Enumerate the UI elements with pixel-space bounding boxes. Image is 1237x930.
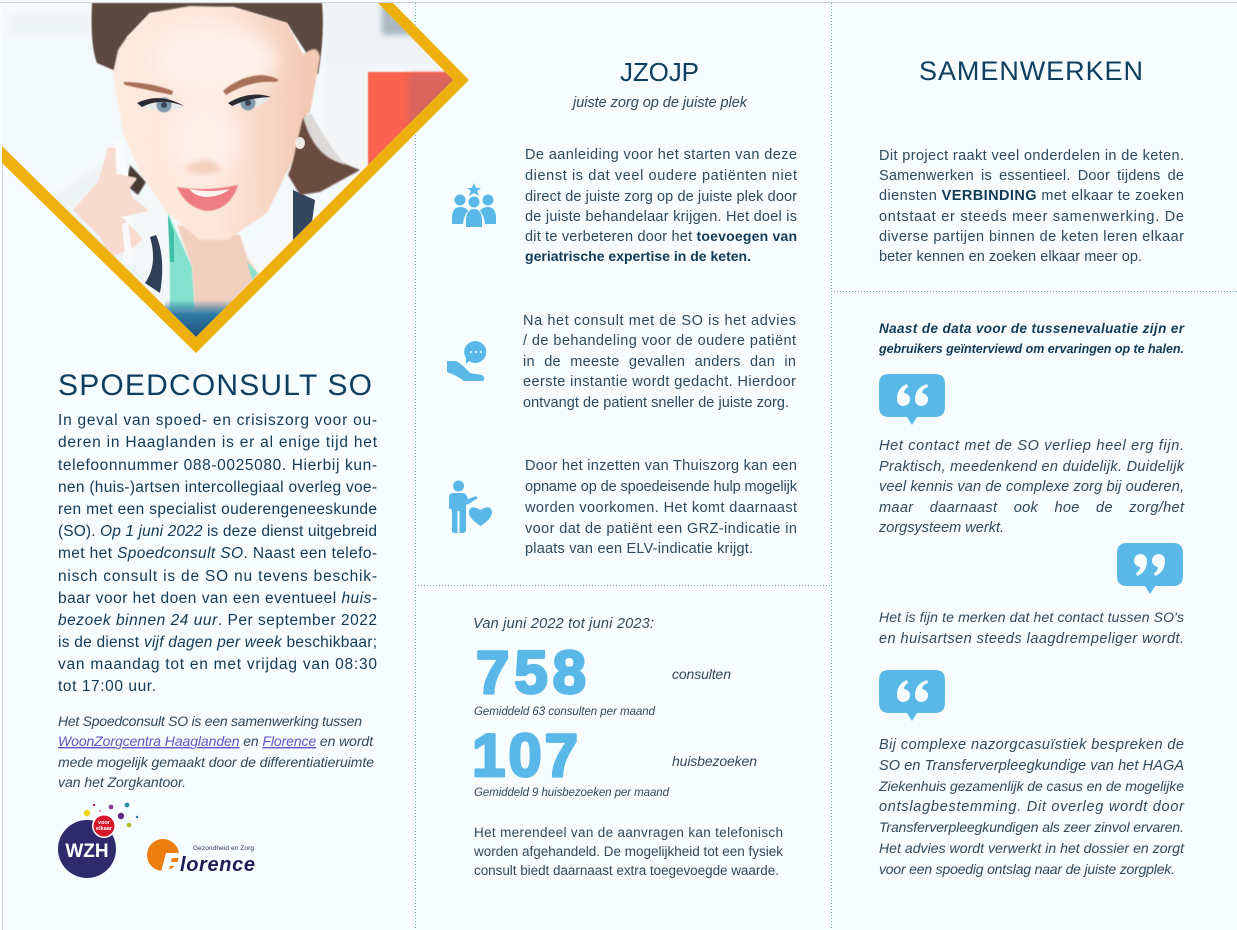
text block: advice after consult — [523, 313, 796, 411]
stats period: Van juni 2022 tot juni 2023: — [473, 616, 654, 632]
text block: interview intro: gebruikers geïnterviewd om ervaringen op te halen. — [878, 342, 1184, 356]
logo: Florence: Gezondheid en Zorg — [193, 845, 254, 852]
text block: reason for the service: De aanleiding voor het starten van deze — [525, 147, 797, 163]
text block: collaboration: ontstaat er steeds meer samenwerking. De — [879, 209, 1184, 225]
text block: introduction: nisch consult is de SO nu tevens beschik- — [58, 568, 377, 585]
text block: introduction: (SO). Op 1 juni 2022 is deze dienst uitgebreid — [58, 523, 377, 540]
icon: group with star — [452, 183, 496, 227]
stats conclusion: Het merendeel van de aanvragen kan telefonisch — [474, 825, 783, 840]
text block: introduction: baar voor het doen van een eventueel huis- — [58, 590, 377, 607]
text block: thuiszorg: worden voorkomen. Het komt daarnaast — [524, 500, 797, 516]
text block: introduction: In geval van spoed- en crisiszorg voor ou- — [58, 412, 377, 429]
text block: introduction: met het Spoedconsult SO. Naast een telefo- — [58, 545, 377, 562]
logo: Florence: lorence — [180, 854, 255, 876]
stat: 758 consultations — [474, 639, 731, 718]
quote 2: en huisartsen steeds laagdrempeliger wordt. — [879, 631, 1184, 647]
text block: partnership note: mede mogelijk gemaakt door de differentiatieruimte — [58, 754, 374, 770]
text block: reason for the service: de juiste behandelaar krijgen. Het doel is — [525, 209, 797, 225]
quote 3: SO en Transferverpleegkundige van het HAGA — [879, 758, 1184, 774]
text block: advice after consult: Na het consult met de SO is het advies — [523, 313, 796, 329]
subheading: juiste zorg op de juiste plek: juiste zorg op de juiste plek — [571, 95, 748, 111]
logo: WZH — [58, 803, 138, 878]
text block: thuiszorg: Door het inzetten van Thuiszorg kan een — [525, 458, 797, 474]
heading: Samenwerken: SAMENWERKEN — [919, 56, 1143, 86]
text block: collaboration — [879, 148, 1184, 265]
text block: thuiszorg — [524, 458, 798, 557]
quote 3: ontslagbestemming. Dit overleg wordt door — [879, 799, 1185, 815]
text block: advice after consult: / de behandeling voor de oudere patiënt — [523, 333, 796, 349]
quote 2: Het is fijn te merken dat het contact tussen SO's — [879, 609, 1184, 625]
text block: introduction: bezoek binnen 24 uur. Per september 2022 — [58, 612, 377, 629]
text block: partnership note: Het Spoedconsult SO is een samenwerking tussen — [58, 713, 362, 729]
quote 2 — [879, 609, 1184, 647]
stats panel — [472, 616, 783, 878]
icon: opening quote bubble 2 — [879, 670, 945, 721]
text block: reason for the service: dienst is dat veel oudere patiënten niet — [525, 168, 797, 184]
quote 1: zorgsysteem werkt. — [878, 520, 1004, 536]
stat: 758 consultations: consulten — [672, 666, 731, 682]
text block: partnership note — [58, 713, 374, 790]
stat: 107 home visits: Gemiddeld 9 huisbezoeken per maand — [474, 787, 670, 799]
icon: opening quote bubble 1 — [879, 374, 945, 425]
stat: 107 home visits: huisbezoeken — [672, 753, 757, 769]
text block: collaboration: beter kennen en zoeken elkaar meer op. — [879, 249, 1142, 265]
quote 1: Praktisch, meedenkend en duidelijk. Duidelijk — [879, 459, 1185, 475]
heading: Spoedconsult SO: SPOEDCONSULT SO — [58, 369, 372, 402]
logo: Florence — [147, 839, 255, 876]
quote 1: maar daarnaast ook hoe de zorg/het — [879, 500, 1185, 516]
quote 3: Bij complexe nazorgcasuïstiek bespreken de — [879, 737, 1184, 753]
heading: JZOJP: JZOJP — [620, 57, 699, 87]
text block: collaboration: Samenwerken is essentieel. Door tijdens de — [879, 168, 1184, 184]
icon: hand with speech bubble — [447, 341, 486, 381]
text block: thuiszorg: voor dat de patiënt een GRZ-indicatie in — [525, 521, 797, 537]
text block: advice after consult: eerste instantie wordt gedacht. Hierdoor — [523, 374, 796, 390]
text block: introduction: van maandag tot en met vrijdag van 08:30 — [58, 656, 377, 673]
logo: WZH: elkaar — [96, 826, 113, 832]
text block: thuiszorg: plaats van een ELV-indicatie krijgt. — [525, 541, 753, 557]
text block: advice after consult: ontvangt de patient sneller de juiste zorg. — [523, 395, 789, 411]
quote 1: veel kennis van de complexe zorg bij ouderen, — [879, 479, 1184, 495]
logo: WZH: voor — [98, 820, 111, 826]
stat: 758 consultations: 758 — [476, 639, 586, 706]
text block: introduction: ren met een specialist ouderengeneeskunde — [58, 501, 377, 518]
text block: interview intro — [878, 321, 1185, 356]
quote 3 — [878, 737, 1185, 877]
text block: introduction: nen (huis-)artsen intercollegiaal overleg voe- — [58, 479, 377, 496]
text block: reason for the service: direct de juiste zorg op de juiste plek door — [525, 189, 797, 205]
icon: closing quote bubble — [1117, 543, 1183, 594]
icon: person with heart — [449, 480, 492, 533]
text block: introduction: telefoonnummer 088-0025080. Hierbij kun- — [58, 457, 377, 474]
stats conclusion — [473, 825, 783, 878]
quote 3: Ziekenhuis gezamenlijk de casus en de mogelijke — [878, 778, 1184, 794]
text block: collaboration: Dit project raakt veel onderdelen in de keten. — [879, 148, 1184, 164]
text block: reason for the service: dit te verbeteren door het toevoegen van — [525, 228, 797, 245]
text block: reason for the service: geriatrische expertise in de keten. — [525, 248, 751, 264]
logo: WZH: WZH — [65, 841, 109, 862]
stats conclusion: consult biedt daarnaast extra toegevoegde waarde. — [474, 863, 779, 878]
quote 3: voor een spoedig ontslag naar de juiste zorgplek. — [879, 861, 1175, 877]
stat: 758 consultations: Gemiddeld 63 consulten per maand — [474, 706, 656, 718]
text block: thuiszorg: opname op de spoedeisende hulp mogelijk — [525, 479, 798, 495]
quote 3: Transferverpleegkundigen als zeer zinvol ervaren. — [879, 819, 1184, 835]
quote 3: Het advies wordt verwerkt in het dossier en zorgt — [879, 840, 1185, 856]
photo: doctor on the phone in a diamond frame — [2, 3, 469, 353]
stat: 107 home visits: 107 — [472, 722, 578, 789]
text block: partnership note: WoonZorgcentra Haaglanden en Florence en wordt — [58, 733, 374, 749]
text block: advice after consult: in de meeste gevallen anders dan in — [523, 354, 796, 370]
photo frame: gold diamond — [2, 3, 469, 353]
text block: introduction: tot 17:00 uur. — [58, 678, 156, 695]
text block: introduction: deren in Haaglanden is er al enige tijd het — [58, 434, 378, 451]
text block: collaboration: diverse partijen binnen de keten leren elkaar — [879, 229, 1184, 245]
stat: 107 home visits — [472, 722, 757, 799]
quote 1: Het contact met de SO verliep heel erg fijn. — [879, 438, 1184, 454]
text block: collaboration: diensten VERBINDING met elkaar te zoeken — [879, 188, 1184, 204]
text block: interview intro: Naast de data voor de tussenevaluatie zijn er — [879, 321, 1185, 336]
text block: introduction: is de dienst vijf dagen per week beschikbaar; — [58, 634, 377, 651]
quote 1 — [878, 438, 1185, 536]
text block: introduction — [58, 412, 378, 695]
text block: partnership note: van het Zorgkantoor. — [58, 774, 186, 790]
text block: reason for the service — [525, 147, 797, 264]
stats conclusion: worden afgehandeld. De mogelijkheid tot een fysiek — [473, 844, 783, 859]
